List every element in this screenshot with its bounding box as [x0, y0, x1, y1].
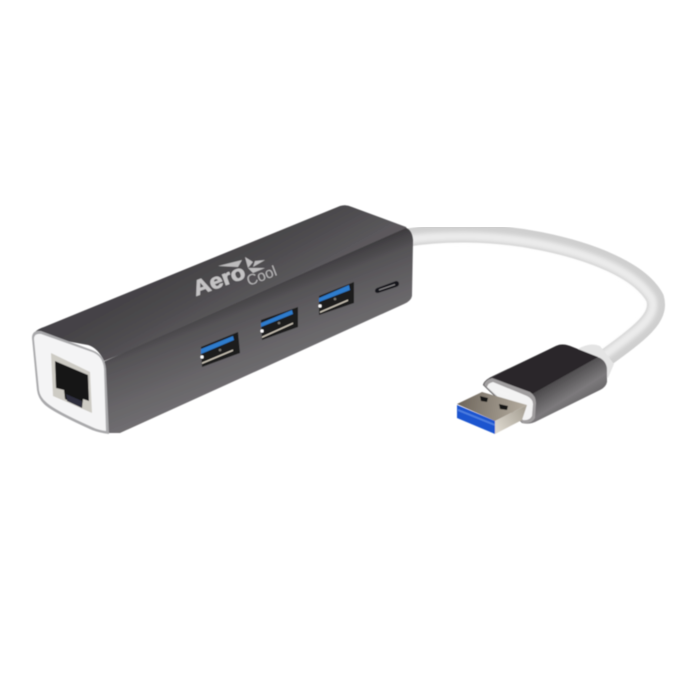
micro USB port [375, 281, 399, 293]
end face: white bezel [32, 331, 109, 434]
front face [103, 228, 413, 433]
USB 3.0 port 3 [318, 282, 354, 315]
logo: AeroCool [190, 257, 279, 301]
metal connector tongue [457, 389, 527, 434]
hub body [32, 205, 413, 434]
logo: AeroCool: Cool [244, 263, 279, 290]
USB 3.0 port 2 [260, 307, 298, 340]
metal housing [483, 344, 607, 424]
strain relief collar [578, 345, 614, 378]
Ethernet port [51, 353, 92, 413]
USB cable [405, 233, 656, 362]
logo: AeroCool: Aero [190, 261, 248, 301]
USB plug [457, 344, 614, 434]
top face with logo [33, 205, 412, 361]
USB 3.0 port 1 [200, 332, 240, 367]
